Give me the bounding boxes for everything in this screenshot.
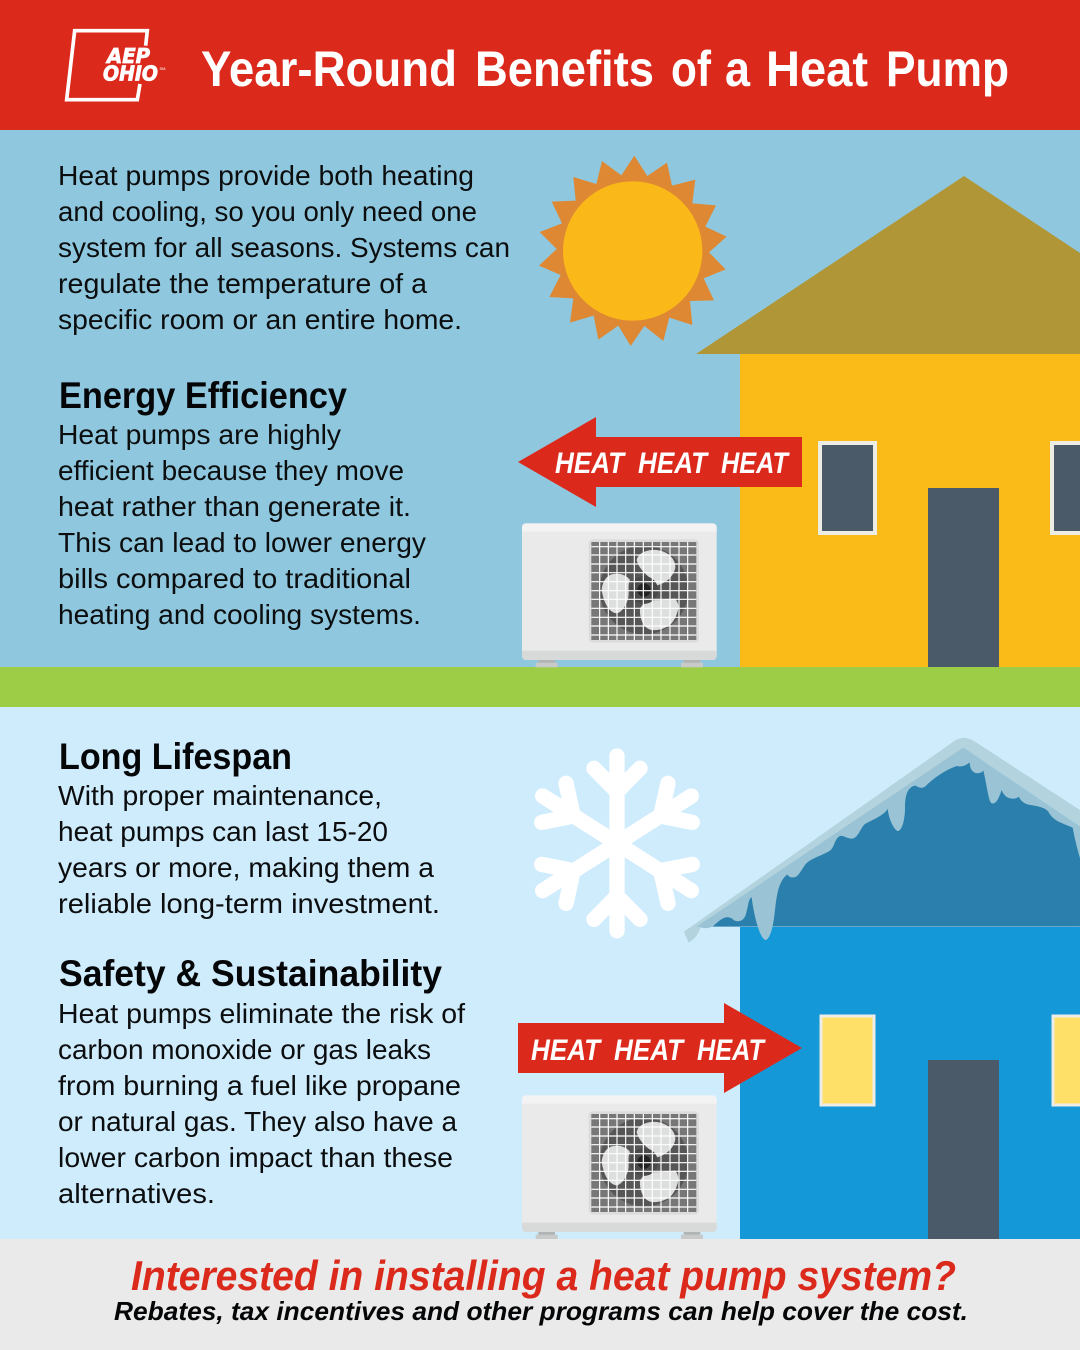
text block: intro: system for all seasons. Systems can [58, 232, 510, 263]
arrow: heat flowing out of house: HEAT [638, 447, 709, 480]
text block: long lifespan: heat pumps can last 15-20 [58, 816, 388, 847]
text block: intro: Heat pumps provide both heating [58, 160, 474, 191]
text block: intro: specific room or an entire home. [58, 304, 462, 335]
text block: energy efficiency: efficient because they move [58, 455, 404, 486]
text block: long lifespan: reliable long-term investment. [58, 888, 440, 919]
heading: Long Lifespan: Long Lifespan [59, 736, 292, 777]
ground: grass strip [0, 667, 1080, 707]
text block: safety and sustainability: or natural gas. They also have a [58, 1106, 457, 1137]
illustration: winter house [684, 738, 1080, 1239]
text block: safety and sustainability: lower carbon impact than these [58, 1142, 453, 1173]
text block: safety and sustainability: Heat pumps eliminate the risk of [58, 998, 465, 1029]
text block: safety and sustainability: from burning a fuel like propane [58, 1070, 461, 1101]
footer call to action [0, 1239, 1080, 1350]
icon: outdoor heat pump unit, winter [522, 1095, 717, 1239]
text block: intro [58, 160, 510, 335]
text block: energy efficiency: bills compared to traditional [58, 563, 411, 594]
panel: summer sky background [0, 130, 1080, 667]
icon: outdoor heat pump unit, summer [522, 523, 717, 667]
logo: AEP Ohio [67, 31, 166, 100]
text block: intro: and cooling, so you only need one [58, 196, 477, 227]
title [201, 41, 1009, 97]
logo: AEP Ohio: OHIO [103, 62, 158, 86]
illustration: summer house [696, 176, 1080, 667]
title: Year-Round [201, 41, 457, 97]
header band [0, 0, 1080, 130]
text block: intro: regulate the temperature of a [58, 268, 427, 299]
arrow: heat flowing into house [518, 1003, 802, 1093]
text block: energy efficiency: heating and cooling systems. [58, 599, 421, 630]
callout subline: Rebates, tax incentives and other programs can help cover the cost. [114, 1296, 968, 1326]
icon: snowflake [542, 756, 692, 931]
arrow: heat flowing into house: HEAT [614, 1034, 685, 1067]
title: Pump [886, 41, 1009, 97]
text block: energy efficiency: heat rather than generate it. [58, 491, 411, 522]
text block: energy efficiency [58, 419, 426, 630]
roof with snow and icicles [684, 738, 1080, 942]
arrow: heat flowing out of house: HEAT [721, 447, 790, 480]
arrow: heat flowing into house: HEAT [697, 1034, 766, 1067]
panel: winter sky background [0, 707, 1080, 1239]
heading: Energy Efficiency: Energy Efficiency [59, 375, 347, 416]
text block: energy efficiency: This can lead to lower energy [58, 527, 426, 558]
text block: safety and sustainability [58, 998, 465, 1209]
logo: AEP Ohio: AEP [105, 44, 150, 68]
text block: safety and sustainability: alternatives. [58, 1178, 215, 1209]
arrow: heat flowing into house: HEAT [531, 1034, 602, 1067]
heading: Safety and Sustainability: Safety & Sustainability [59, 953, 442, 994]
logo: AEP Ohio: SM [160, 66, 166, 71]
text block: safety and sustainability: carbon monoxide or gas leaks [58, 1034, 431, 1065]
title: of [671, 41, 711, 97]
text block: long lifespan: With proper maintenance, [58, 780, 382, 811]
text block: energy efficiency: Heat pumps are highly [58, 419, 341, 450]
text block: long lifespan: years or more, making them a [58, 852, 434, 883]
arrow: heat flowing out of house: HEAT [555, 447, 626, 480]
arrow: heat flowing out of house [518, 417, 802, 507]
icon: sun [539, 156, 727, 346]
text block: long lifespan [58, 780, 440, 919]
title: Heat [766, 41, 868, 97]
title: a [725, 41, 751, 97]
title: Benefits [475, 41, 654, 97]
callout headline: Interested in installing a heat pump system? [131, 1252, 956, 1299]
